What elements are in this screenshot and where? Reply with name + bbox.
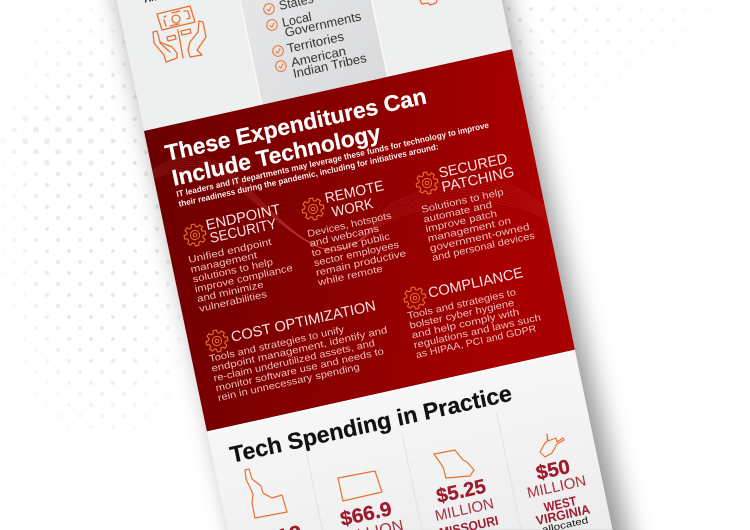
block: cost optimization: Tools and strategies to unify: [208, 324, 345, 365]
block: endpoint security: and minimize: [196, 280, 265, 305]
icon: north dakota outline: [338, 471, 382, 501]
stat: north dakota: $66.9: [338, 498, 394, 530]
sheet shadow: [110, 0, 652, 530]
heading: Tech Spending in Practice: [228, 380, 514, 468]
stat: west virginia: WEST: [543, 493, 578, 515]
block: endpoint security: SECURITY: [208, 216, 278, 247]
block: remote work: Devices, hotspots: [306, 210, 393, 240]
icon: gear: [402, 285, 428, 311]
block: remote work: while remote: [316, 264, 384, 289]
block: secured patching: PATCHING: [440, 164, 516, 196]
block: remote work: remain productive: [315, 248, 407, 279]
item: local governments: Governments: [283, 8, 362, 40]
icon: top right cut-off: [420, 0, 437, 5]
block: cost optimization: [204, 294, 395, 404]
block: remote work: and webcams: [309, 223, 380, 250]
icon: idaho outline: [245, 469, 287, 518]
item: american indian tribes: American: [290, 43, 347, 70]
stat: missouri: MILLION: [433, 495, 495, 525]
block: secured patching: management on: [427, 216, 512, 245]
stat: west virginia: VIRGINIA: [535, 501, 592, 528]
stat: missouri: [429, 474, 500, 530]
item: american indian tribes: Indian Tribes: [292, 50, 368, 81]
panel: technology expenditures: [144, 49, 575, 432]
icon: gear: [414, 170, 440, 196]
decorative waves: [151, 82, 548, 303]
block: secured patching: Solutions to help: [420, 187, 505, 216]
block: cost optimization: endpoint management, identify and: [210, 325, 388, 375]
block: secured patching: [413, 149, 536, 264]
block: endpoint security: ENDPOINT: [205, 202, 282, 234]
stat: missouri: $5.25: [435, 476, 488, 508]
heading: These Expenditures Can: [163, 84, 429, 166]
panel: tech spending in practice: [207, 350, 613, 530]
block: secured patching: automate and: [423, 200, 493, 226]
block: cost optimization: COST OPTIMIZATION: [230, 298, 377, 346]
intro text: their readiness during the pandemic, including for initiatives around:: [178, 141, 439, 209]
block: remote work: sector employees: [313, 239, 400, 269]
block: endpoint security: solutions to help: [192, 257, 274, 285]
block: compliance: Tools and strategies to: [406, 287, 517, 322]
item: local governments: Local: [281, 9, 313, 30]
block: compliance: as HIPAA, PCI and GDPR: [415, 324, 537, 361]
block: compliance: regulations and laws such: [413, 312, 542, 351]
block: cost optimization: re-claim underutilized assets, and: [213, 338, 376, 385]
block: secured patching: SECURED: [437, 151, 509, 182]
panel: top columns: [116, 0, 512, 133]
block: endpoint security: vulnerabilities: [198, 289, 268, 315]
item: local governments: [265, 0, 362, 43]
list: eligible recipients: [262, 0, 371, 84]
block: endpoint security: [181, 202, 298, 315]
heading: Include Technology: [170, 120, 383, 191]
icon: gear: [300, 196, 326, 222]
icon: west virginia outline: [540, 434, 564, 457]
block: secured patching: and personal devices: [431, 230, 536, 264]
block: compliance: and help comply with: [411, 307, 520, 341]
block: cost optimization: monitor software use and needs to: [215, 346, 385, 394]
infographic sheet: [116, 0, 613, 530]
block: compliance: bolster cyber hygiene: [409, 298, 515, 332]
block: compliance: [402, 261, 544, 361]
block: endpoint security: management: [190, 250, 259, 276]
block: secured patching: government-owned: [429, 222, 531, 254]
icon: gear: [182, 222, 208, 248]
item: territories: Territories: [286, 29, 345, 56]
block: endpoint security: improve compliance: [194, 263, 294, 295]
icon: missouri outline: [434, 450, 474, 478]
block: remote work: to ensure public: [311, 231, 391, 259]
intro text: IT leaders and IT departments may leverage these funds for technology to improve: [175, 120, 490, 199]
item: american indian tribes: [274, 39, 368, 84]
stat: west virginia: MILLION: [526, 472, 588, 502]
icon: gear: [204, 328, 230, 354]
block: remote work: REMOTE: [324, 178, 386, 207]
block: compliance: COMPLIANCE: [427, 265, 525, 302]
block: remote work: WORK: [331, 196, 375, 221]
block: cost optimization: rein in unnecessary spending: [217, 362, 361, 404]
stat: west virginia: [522, 453, 595, 530]
block: remote work: [299, 177, 409, 289]
stat: west virginia: $50: [534, 456, 572, 485]
icon: money in hands: [153, 6, 206, 62]
block: secured patching: improve patch: [425, 209, 498, 235]
block: endpoint security: Unified endpoint: [187, 237, 273, 266]
